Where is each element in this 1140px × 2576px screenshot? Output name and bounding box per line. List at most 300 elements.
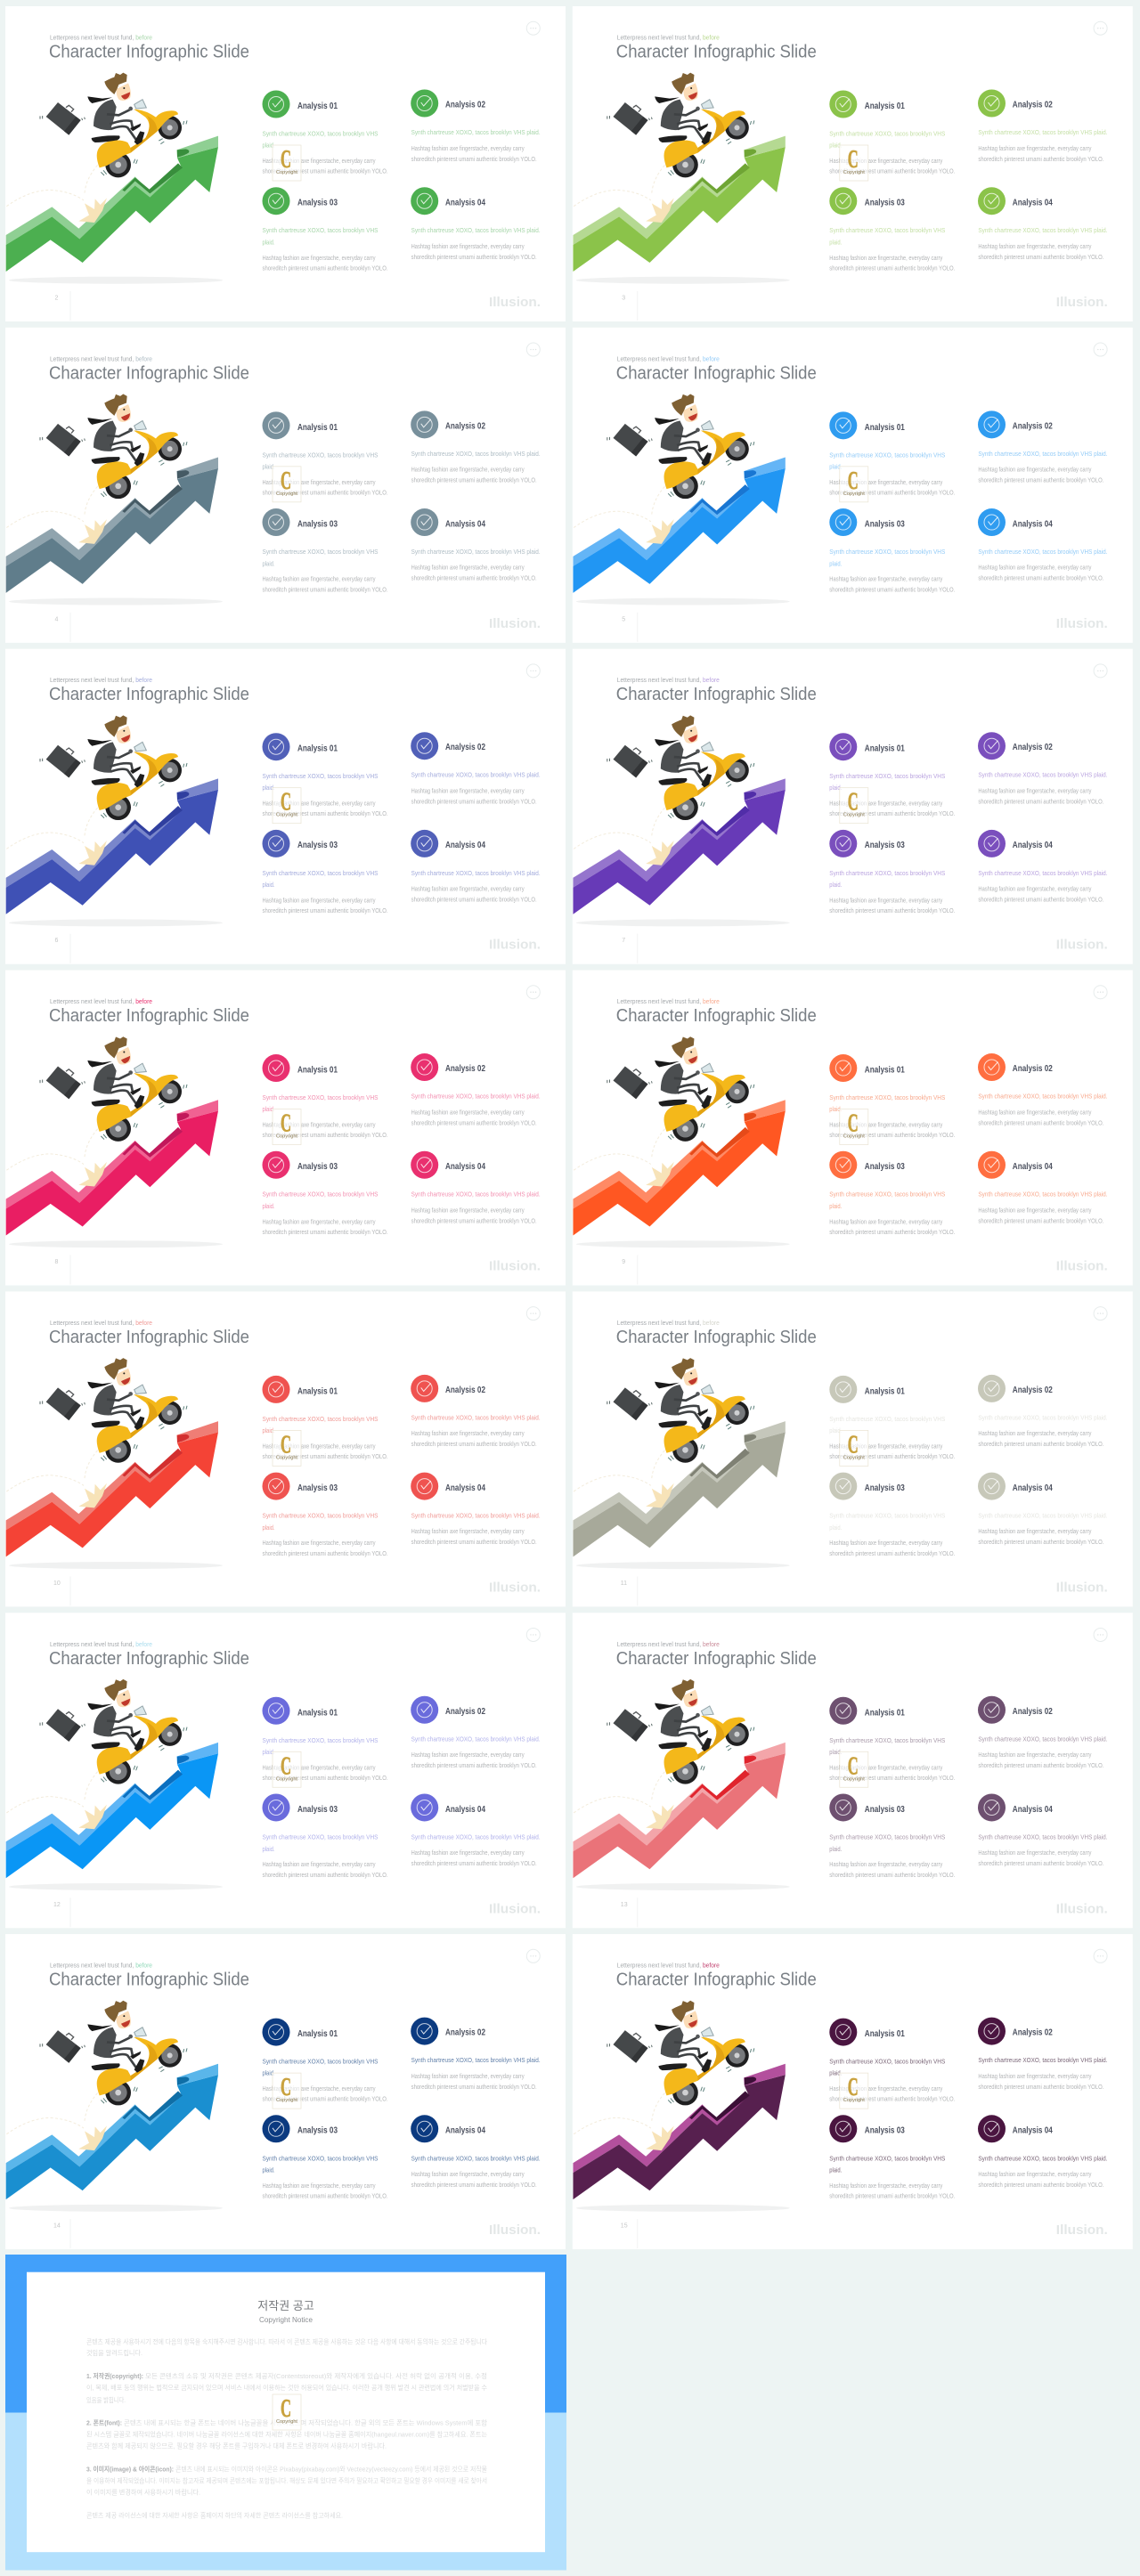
analysis 03: shoreditch pinterest umami authentic brooklyn YOLO. (829, 587, 955, 593)
analysis 02: shoreditch pinterest umami authentic brooklyn YOLO. (978, 478, 1103, 484)
analysis 03: Hashtag fashion axe fingerstache, everyday carry (829, 1540, 943, 1547)
subtitle: Letterpress next level trust fund, before (617, 1642, 720, 1648)
analysis 01: Synth chartreuse XOXO, tacos brooklyn VHS (829, 1093, 945, 1101)
analysis 03: shoreditch pinterest umami authentic brooklyn YOLO. (262, 908, 388, 914)
ground shadow (9, 919, 223, 926)
analysis 03: Synth chartreuse XOXO, tacos brooklyn VHS (829, 869, 945, 877)
rising arrow (573, 1743, 786, 1878)
character on scooter (574, 1358, 754, 1507)
notice item 3 image and icon: 이 이미지를 변경하여 사용하시기 바랍니다. (86, 2488, 200, 2497)
analysis 02 (411, 2018, 541, 2091)
analysis 03: shoreditch pinterest umami authentic brooklyn YOLO. (829, 908, 955, 914)
analysis 01: Analysis 01 (865, 2028, 905, 2039)
panel: slide 8 pink (5, 971, 566, 1286)
analysis 03: plaid. (829, 1524, 842, 1532)
analysis 01: Synth chartreuse XOXO, tacos brooklyn VHS (829, 1415, 945, 1423)
icon: more menu (1094, 986, 1107, 999)
subtitle: Letterpress next level trust fund, before (50, 356, 152, 362)
analysis 04 (978, 508, 1107, 582)
analysis 02: Hashtag fashion axe fingerstache, everyday carry (411, 467, 525, 474)
title: Character Infographic Slide (49, 43, 249, 62)
analysis 01: shoreditch pinterest umami authentic brooklyn YOLO. (829, 169, 955, 175)
analysis 02: shoreditch pinterest umami authentic brooklyn YOLO. (411, 478, 537, 484)
analysis 04: Analysis 04 (445, 198, 485, 208)
watermark (273, 1430, 301, 1466)
analysis 03: plaid. (262, 881, 274, 889)
page number: 14 (53, 2223, 61, 2230)
brand: Illusion. (1056, 1901, 1108, 1916)
analysis 02: Hashtag fashion axe fingerstache, everyday carry (978, 1109, 1092, 1116)
analysis 04 (411, 1473, 541, 1546)
analysis 04: shoreditch pinterest umami authentic brooklyn YOLO. (978, 898, 1103, 903)
title: Character Infographic Slide (49, 685, 249, 704)
analysis 04: Hashtag fashion axe fingerstache, everyday carry (411, 1529, 525, 1535)
analysis 03: Hashtag fashion axe fingerstache, everyday carry (829, 577, 943, 583)
analysis 04: shoreditch pinterest umami authentic brooklyn YOLO. (411, 898, 537, 903)
title: Character Infographic Slide (49, 1971, 249, 1990)
analysis 03: shoreditch pinterest umami authentic brooklyn YOLO. (262, 265, 388, 272)
analysis 01: shoreditch pinterest umami authentic brooklyn YOLO. (829, 1454, 955, 1460)
analysis 01: Synth chartreuse XOXO, tacos brooklyn VHS (829, 451, 945, 459)
ground shadow (576, 1883, 790, 1890)
watermark (273, 145, 301, 181)
analysis 02: Analysis 02 (445, 2027, 485, 2038)
rising arrow (6, 778, 218, 914)
analysis 02: shoreditch pinterest umami authentic brooklyn YOLO. (978, 1120, 1103, 1126)
icon: more menu (1094, 21, 1107, 35)
analysis 04: Hashtag fashion axe fingerstache, everyday carry (978, 887, 1092, 892)
analysis 03: plaid. (262, 2166, 274, 2174)
title: Character Infographic Slide (49, 1649, 249, 1669)
analysis 01: plaid. (829, 1426, 842, 1434)
ground shadow (576, 598, 790, 605)
watermark: Copyright (843, 1776, 865, 1782)
analysis 03: plaid. (829, 881, 842, 889)
ground shadow (576, 1240, 790, 1247)
analysis 03 (829, 508, 955, 593)
rising arrow (573, 778, 786, 914)
watermark: Copyright (843, 492, 865, 497)
analysis 01: Analysis 01 (297, 2028, 338, 2039)
panel: slide 14 navy and sky (5, 1934, 566, 2249)
analysis 03: Analysis 03 (297, 518, 338, 529)
analysis 03: Hashtag fashion axe fingerstache, everyday carry (262, 2183, 376, 2190)
analysis 02: Hashtag fashion axe fingerstache, everyday carry (978, 2074, 1092, 2080)
watermark: C (281, 2395, 291, 2423)
analysis 01: plaid. (829, 1748, 842, 1756)
icon: more menu (526, 664, 540, 678)
analysis 02: shoreditch pinterest umami authentic brooklyn YOLO. (411, 1442, 537, 1448)
analysis 03: Synth chartreuse XOXO, tacos brooklyn VHS (829, 1512, 945, 1520)
analysis 01: Hashtag fashion axe fingerstache, everyday carry (262, 1123, 376, 1129)
analysis 01: Analysis 01 (297, 1386, 338, 1396)
analysis 04: Analysis 04 (445, 518, 485, 529)
ground shadow (9, 1240, 223, 1247)
analysis 01: Hashtag fashion axe fingerstache, everyday carry (829, 1443, 943, 1450)
analysis 04 (978, 1151, 1107, 1224)
analysis 04 (978, 1473, 1107, 1546)
rising arrow (573, 1100, 786, 1236)
notice item 3 image and icon: 3. 이미지(image) & 아이콘(icon): (86, 2465, 174, 2474)
analysis 03: Hashtag fashion axe fingerstache, everyday carry (262, 898, 376, 905)
analysis 02: shoreditch pinterest umami authentic brooklyn YOLO. (978, 157, 1103, 163)
watermark (273, 1109, 301, 1145)
analysis 04: Analysis 04 (1013, 2125, 1053, 2136)
analysis 04: Synth chartreuse XOXO, tacos brooklyn VHS plaid. (978, 226, 1107, 234)
analysis 01: Analysis 01 (297, 744, 338, 754)
analysis 04: Hashtag fashion axe fingerstache, everyday carry (411, 887, 525, 892)
analysis 03 (262, 2115, 388, 2200)
analysis 01 (262, 2019, 388, 2103)
analysis 04: Hashtag fashion axe fingerstache, everyday carry (978, 1207, 1092, 1214)
analysis 01: plaid. (829, 2069, 842, 2077)
analysis 02: Analysis 02 (445, 1706, 485, 1717)
watermark: Copyright (843, 1455, 865, 1460)
panel: slide 6 indigo (5, 649, 566, 964)
brand: Illusion. (489, 1901, 541, 1916)
analysis 03: shoreditch pinterest umami authentic brooklyn YOLO. (262, 587, 388, 593)
analysis 01 (262, 733, 388, 817)
analysis 03 (829, 1151, 955, 1236)
notice item 2 font: 2. 폰트(font): (86, 2418, 122, 2427)
page number: 2 (55, 296, 59, 301)
analysis 02 (978, 2018, 1107, 2091)
analysis 04 (978, 2115, 1107, 2189)
analysis 01: Synth chartreuse XOXO, tacos brooklyn VHS (262, 772, 379, 780)
analysis 03: Analysis 03 (297, 1161, 338, 1172)
subtitle: Letterpress next level trust fund, before (50, 1321, 152, 1327)
analysis 01: plaid. (262, 462, 274, 470)
analysis 03 (262, 1473, 388, 1557)
watermark: C (848, 146, 859, 174)
analysis 01: shoreditch pinterest umami authentic brooklyn YOLO. (829, 490, 955, 496)
analysis 04: shoreditch pinterest umami authentic brooklyn YOLO. (978, 576, 1103, 582)
watermark (273, 2394, 301, 2430)
watermark (273, 1751, 301, 1787)
analysis 04: shoreditch pinterest umami authentic brooklyn YOLO. (411, 1540, 537, 1546)
notice item 1 copyright: 이, 복제, 배포 등의 행위는 법적으로 금지되어 있으며 서비스 내에서 이용하는 것만 허용되어 있습니다. 이러한 공개 행위 발견 시 관련법에 의거 처벌받을 수 (86, 2384, 487, 2392)
analysis 01: Hashtag fashion axe fingerstache, everyday carry (829, 1765, 943, 1771)
analysis 04 (411, 1151, 541, 1224)
analysis 03: Analysis 03 (865, 1161, 905, 1172)
analysis 02 (411, 1053, 541, 1126)
analysis 03: Synth chartreuse XOXO, tacos brooklyn VHS (262, 548, 379, 556)
analysis 02: Synth chartreuse XOXO, tacos brooklyn VHS plaid. (411, 128, 541, 136)
analysis 01: shoreditch pinterest umami authentic brooklyn YOLO. (262, 2097, 388, 2103)
analysis 04: shoreditch pinterest umami authentic brooklyn YOLO. (978, 1861, 1103, 1867)
rising arrow (6, 1743, 218, 1878)
analysis 01: Analysis 01 (865, 101, 905, 111)
brand: Illusion. (1056, 616, 1108, 631)
panel: slide 7 purple (573, 649, 1133, 964)
title: Character Infographic Slide (616, 1006, 817, 1026)
analysis 02: Analysis 02 (1013, 1706, 1053, 1717)
analysis 03: plaid. (829, 1202, 842, 1210)
notice item 2 font: 콘텐츠 내에 표시되는 한글 폰트는 네이버 나눔글꼴을 사용하였으며 저작되었습니다. 한글 외의 모든 폰트는 Windows System에 포함 (124, 2418, 487, 2427)
analysis 01: Analysis 01 (865, 1707, 905, 1718)
analysis 02 (411, 732, 541, 805)
analysis 03: Hashtag fashion axe fingerstache, everyday carry (262, 1862, 376, 1868)
analysis 01 (262, 91, 388, 175)
analysis 02 (411, 1696, 541, 1769)
notice item 3 image and icon (86, 2465, 487, 2497)
icon: more menu (526, 1307, 540, 1321)
analysis 03: plaid. (829, 1845, 842, 1853)
analysis 02: Hashtag fashion axe fingerstache, everyday carry (978, 1431, 1092, 1437)
ground shadow (576, 919, 790, 926)
analysis 02: Hashtag fashion axe fingerstache, everyday carry (978, 467, 1092, 474)
watermark (840, 145, 868, 181)
watermark: C (848, 789, 859, 817)
analysis 04 (978, 187, 1107, 261)
analysis 01: Hashtag fashion axe fingerstache, everyday carry (829, 2086, 943, 2092)
analysis 01: plaid. (262, 1105, 274, 1113)
analysis 02: shoreditch pinterest umami authentic brooklyn YOLO. (978, 1763, 1103, 1769)
character on scooter (6, 1036, 187, 1187)
watermark: C (281, 467, 291, 495)
analysis 01: plaid. (262, 784, 274, 792)
ground shadow (9, 1562, 223, 1569)
watermark: Copyright (843, 2098, 865, 2103)
analysis 04: shoreditch pinterest umami authentic brooklyn YOLO. (411, 576, 537, 582)
character on scooter (6, 394, 187, 544)
analysis 01 (829, 91, 955, 175)
panel: slide 11 warm grey (573, 1291, 1133, 1606)
analysis 03: Hashtag fashion axe fingerstache, everyday carry (829, 898, 943, 905)
rising arrow (573, 136, 786, 272)
analysis 02: Hashtag fashion axe fingerstache, everyday carry (411, 1109, 525, 1116)
analysis 02 (411, 410, 541, 484)
panel: slide 10 red (5, 1291, 566, 1606)
ground shadow (9, 1883, 223, 1890)
analysis 01: Hashtag fashion axe fingerstache, everyday carry (829, 158, 943, 165)
analysis 02: shoreditch pinterest umami authentic brooklyn YOLO. (411, 157, 537, 163)
watermark (273, 467, 301, 502)
analysis 04: Hashtag fashion axe fingerstache, everyday carry (411, 1207, 525, 1214)
icon: more menu (1094, 664, 1107, 678)
analysis 01: Synth chartreuse XOXO, tacos brooklyn VHS (829, 1736, 945, 1744)
brand: Illusion. (1056, 938, 1108, 953)
icon: more menu (1094, 343, 1107, 356)
watermark: C (848, 467, 859, 495)
analysis 02: Synth chartreuse XOXO, tacos brooklyn VHS plaid. (978, 771, 1107, 779)
analysis 04: Analysis 04 (445, 2125, 485, 2136)
notice intro: 것임을 알려드립니다. (86, 2349, 142, 2357)
character on scooter (574, 73, 754, 223)
analysis 03: Synth chartreuse XOXO, tacos brooklyn VHS (262, 1832, 379, 1841)
analysis 04: Hashtag fashion axe fingerstache, everyday carry (978, 1850, 1092, 1857)
subtitle: Letterpress next level trust fund, before (617, 678, 720, 684)
character on scooter (574, 1036, 754, 1187)
brand: Illusion. (489, 295, 541, 310)
analysis 04: Hashtag fashion axe fingerstache, everyday carry (978, 565, 1092, 572)
ground shadow (576, 1562, 790, 1569)
ground shadow (576, 2205, 790, 2212)
notice closing: 콘텐츠 제공 라이선스에 대한 자세한 사항은 홈페이지 하단의 자세한 콘텐츠 라이선스를 참고하세요. (86, 2511, 343, 2520)
analysis 04: Analysis 04 (1013, 1483, 1053, 1493)
analysis 02: shoreditch pinterest umami authentic brooklyn YOLO. (411, 2084, 537, 2091)
analysis 04: Analysis 04 (1013, 198, 1053, 208)
analysis 03: Analysis 03 (865, 1483, 905, 1493)
watermark (840, 788, 868, 824)
subtitle: Letterpress next level trust fund, before (50, 1963, 152, 1970)
watermark (840, 1430, 868, 1466)
analysis 03 (829, 1793, 955, 1879)
analysis 04: Synth chartreuse XOXO, tacos brooklyn VHS plaid. (978, 548, 1107, 556)
analysis 02: Analysis 02 (1013, 1063, 1053, 1074)
analysis 01: plaid. (829, 1105, 842, 1113)
subtitle: Letterpress next level trust fund, before (50, 678, 152, 684)
title: Character Infographic Slide (616, 43, 817, 62)
panel: slide 5 blue (573, 328, 1133, 643)
notice item 3 image and icon: 을 이용하여 제작되었습니다. 이미지는 참고자료 제공되며 콘텐츠에는 포함됩니다. 해상도 문제 있다면 주의가 필요하고 확인하고 필요할 경우 이미지를 새로 찾아서 (86, 2477, 487, 2484)
panel: slide 15 plum (573, 1934, 1133, 2249)
watermark: C (281, 1431, 291, 1459)
analysis 04: Synth chartreuse XOXO, tacos brooklyn VHS plaid. (411, 1832, 541, 1841)
subtitle: Letterpress next level trust fund, before (617, 1321, 720, 1327)
analysis 01: Hashtag fashion axe fingerstache, everyday carry (262, 801, 376, 808)
analysis 04: shoreditch pinterest umami authentic brooklyn YOLO. (978, 1218, 1103, 1224)
analysis 03: Synth chartreuse XOXO, tacos brooklyn VHS (262, 1512, 379, 1520)
analysis 04: Synth chartreuse XOXO, tacos brooklyn VHS plaid. (411, 548, 541, 556)
analysis 04: Analysis 04 (445, 840, 485, 850)
analysis 04 (978, 1793, 1107, 1867)
rising arrow (6, 2064, 218, 2199)
analysis 04: Analysis 04 (1013, 518, 1053, 529)
icon: more menu (526, 1628, 540, 1641)
character on scooter (574, 2001, 754, 2150)
panel: slide 3 lime (573, 6, 1133, 321)
subtitle: Letterpress next level trust fund, before (617, 36, 720, 41)
analysis 01: shoreditch pinterest umami authentic brooklyn YOLO. (262, 811, 388, 817)
analysis 02: Synth chartreuse XOXO, tacos brooklyn VHS plaid. (411, 2056, 541, 2064)
analysis 01: Hashtag fashion axe fingerstache, everyday carry (262, 1443, 376, 1450)
analysis 02: Synth chartreuse XOXO, tacos brooklyn VHS plaid. (411, 450, 541, 458)
analysis 03: shoreditch pinterest umami authentic brooklyn YOLO. (829, 1551, 955, 1557)
page number: 9 (622, 1259, 625, 1265)
rising arrow (6, 1100, 218, 1236)
analysis 04: shoreditch pinterest umami authentic brooklyn YOLO. (411, 1861, 537, 1867)
character on scooter (574, 394, 754, 544)
notice intro: 콘텐츠 제공을 사용하시기 전에 다음의 항목을 숙지해주시면 감사합니다. 따라서 이 콘텐츠 제공을 사용하는 것은 다음 사항에 대해서 동의하는 것으로 간주됩니다 (86, 2338, 487, 2345)
analysis 04: Synth chartreuse XOXO, tacos brooklyn VHS plaid. (411, 869, 541, 877)
notice subtitle: Copyright Notice (259, 2315, 313, 2324)
analysis 01: shoreditch pinterest umami authentic brooklyn YOLO. (262, 1133, 388, 1139)
analysis 02: Analysis 02 (445, 1063, 485, 1074)
brand: Illusion. (489, 938, 541, 953)
analysis 02: Analysis 02 (1013, 1385, 1053, 1395)
analysis 03: plaid. (829, 239, 842, 246)
analysis 04: Hashtag fashion axe fingerstache, everyday carry (978, 1529, 1092, 1535)
watermark: Copyright (276, 170, 298, 175)
analysis 04: Hashtag fashion axe fingerstache, everyday carry (978, 244, 1092, 250)
analysis 01: plaid. (262, 141, 274, 150)
analysis 04: shoreditch pinterest umami authentic brooklyn YOLO. (411, 2182, 537, 2189)
analysis 02: Synth chartreuse XOXO, tacos brooklyn VHS plaid. (978, 2056, 1107, 2064)
page number: 15 (621, 2223, 628, 2230)
analysis 03: Hashtag fashion axe fingerstache, everyday carry (829, 1862, 943, 1868)
analysis 03: Hashtag fashion axe fingerstache, everyday carry (829, 256, 943, 262)
subtitle: Letterpress next level trust fund, before (50, 999, 152, 1005)
analysis 03: Synth chartreuse XOXO, tacos brooklyn VHS (262, 869, 379, 877)
title: Character Infographic Slide (49, 363, 249, 383)
panel: slide 4 slate (5, 328, 566, 643)
page number: 3 (622, 296, 625, 301)
analysis 04: Hashtag fashion axe fingerstache, everyday carry (411, 1850, 525, 1857)
analysis 01: Analysis 01 (297, 101, 338, 111)
analysis 01: shoreditch pinterest umami authentic brooklyn YOLO. (262, 1454, 388, 1460)
notice item 1 copyright: 있음을 밝힙니다. (86, 2396, 126, 2404)
analysis 03: shoreditch pinterest umami authentic brooklyn YOLO. (262, 1230, 388, 1236)
analysis 04: Hashtag fashion axe fingerstache, everyday carry (411, 565, 525, 572)
analysis 01: Hashtag fashion axe fingerstache, everyday carry (829, 480, 943, 486)
watermark: Copyright (276, 2419, 298, 2425)
analysis 01 (262, 1697, 388, 1782)
analysis 02 (978, 732, 1107, 805)
watermark: C (848, 2074, 859, 2101)
analysis 01: Synth chartreuse XOXO, tacos brooklyn VHS (829, 130, 945, 137)
icon: more menu (1094, 1949, 1107, 1962)
analysis 04: Analysis 04 (445, 1161, 485, 1172)
analysis 01: Hashtag fashion axe fingerstache, everyday carry (262, 1765, 376, 1771)
analysis 03: plaid. (262, 1524, 274, 1532)
analysis 03: plaid. (262, 239, 274, 246)
analysis 02: Synth chartreuse XOXO, tacos brooklyn VHS plaid. (978, 128, 1107, 136)
analysis 03: Analysis 03 (297, 1483, 338, 1493)
analysis 04: Synth chartreuse XOXO, tacos brooklyn VHS plaid. (411, 226, 541, 234)
analysis 02 (978, 1696, 1107, 1769)
analysis 03 (829, 187, 955, 272)
analysis 04: shoreditch pinterest umami authentic brooklyn YOLO. (978, 2182, 1103, 2189)
analysis 02: Analysis 02 (1013, 420, 1053, 431)
page number: 7 (622, 938, 625, 944)
title: Character Infographic Slide (616, 1649, 817, 1669)
analysis 03: Hashtag fashion axe fingerstache, everyday carry (829, 2183, 943, 2190)
analysis 01: shoreditch pinterest umami authentic brooklyn YOLO. (829, 1776, 955, 1782)
panel: copyright notice (5, 2255, 566, 2570)
analysis 04: shoreditch pinterest umami authentic brooklyn YOLO. (978, 1540, 1103, 1546)
analysis 03: Synth chartreuse XOXO, tacos brooklyn VHS (829, 548, 945, 556)
analysis 04 (411, 508, 541, 582)
panel: slide 12 periwinkle and blue (5, 1613, 566, 1928)
watermark: C (281, 146, 291, 174)
analysis 03: Analysis 03 (865, 1804, 905, 1815)
analysis 01 (829, 411, 955, 496)
analysis 02: Analysis 02 (445, 100, 485, 110)
analysis 04: Synth chartreuse XOXO, tacos brooklyn VHS plaid. (978, 1190, 1107, 1199)
analysis 01: Synth chartreuse XOXO, tacos brooklyn VHS (262, 451, 379, 459)
analysis 02: Analysis 02 (1013, 742, 1053, 752)
analysis 02: Analysis 02 (1013, 2027, 1053, 2038)
watermark: Copyright (276, 2098, 298, 2103)
analysis 01 (829, 1376, 955, 1460)
notice title: 저작권 공고 (257, 2299, 314, 2312)
title: Character Infographic Slide (49, 1328, 249, 1347)
analysis 04 (411, 1793, 541, 1867)
rising arrow (6, 458, 218, 593)
icon: more menu (1094, 1628, 1107, 1641)
analysis 02: Synth chartreuse XOXO, tacos brooklyn VHS plaid. (978, 1735, 1107, 1743)
analysis 03: shoreditch pinterest umami authentic brooklyn YOLO. (262, 2194, 388, 2200)
analysis 04 (411, 830, 541, 903)
brand: Illusion. (1056, 2223, 1108, 2238)
title: Character Infographic Slide (616, 1328, 817, 1347)
character on scooter (6, 1358, 187, 1507)
analysis 03: plaid. (262, 559, 274, 567)
analysis 03 (262, 508, 388, 593)
analysis 01: Analysis 01 (297, 1065, 338, 1076)
analysis 04: Analysis 04 (1013, 1804, 1053, 1815)
